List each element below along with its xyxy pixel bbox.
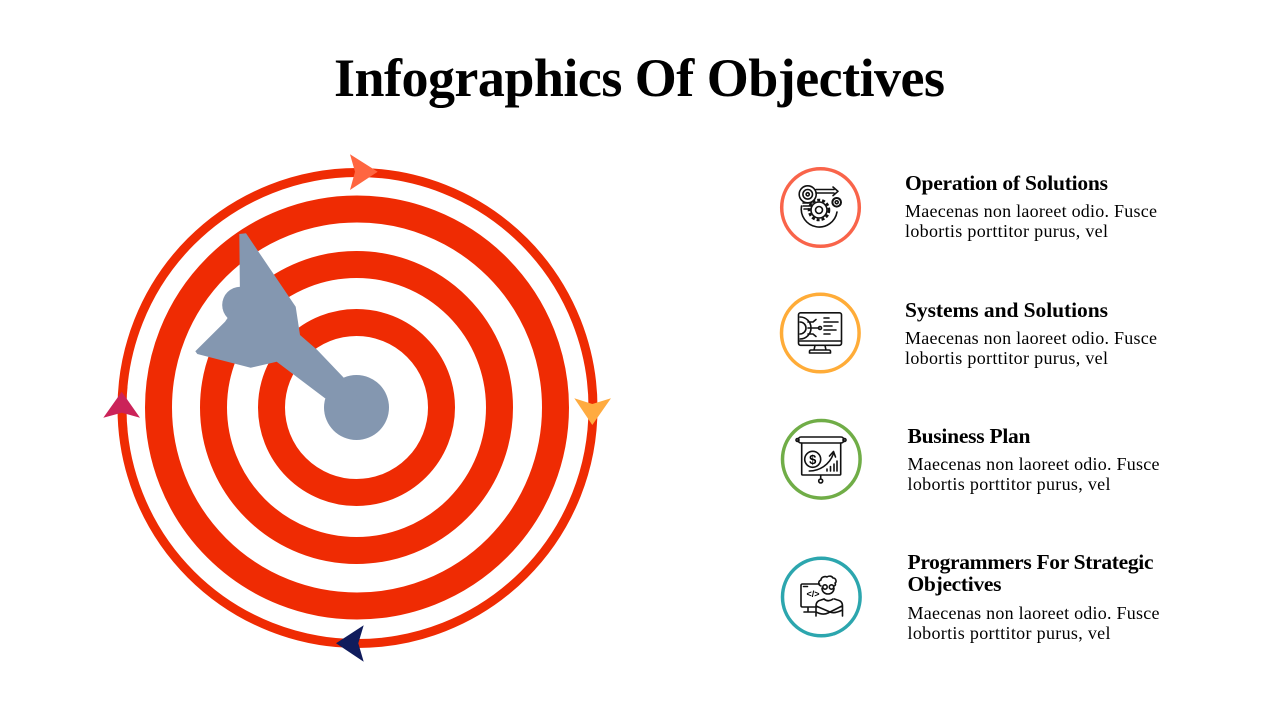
description bbox=[908, 603, 1160, 643]
arrow: yellow bbox=[574, 398, 611, 425]
icon: presentation board with dollar bbox=[782, 420, 860, 498]
target ring 2 bbox=[214, 264, 500, 550]
description: Maecenas non laoreet odio. Fusce bbox=[905, 328, 1157, 348]
heading: Programmers For Strategic bbox=[908, 550, 1154, 574]
description: lobortis porttitor purus, vel bbox=[908, 474, 1110, 494]
target ring 1 bbox=[158, 209, 556, 606]
description: Maecenas non laoreet odio. Fusce bbox=[905, 201, 1157, 221]
arrow: pink bbox=[103, 392, 140, 418]
title: Infographics Of Objectives bbox=[334, 48, 945, 108]
icon: gears and light bulb bbox=[782, 169, 859, 246]
target diagram bbox=[103, 154, 611, 662]
description: lobortis porttitor purus, vel bbox=[905, 348, 1108, 368]
description bbox=[905, 201, 1157, 241]
item: Programmers For Strategic Objectives bbox=[782, 550, 1160, 643]
icon: programmer at monitor: </> bbox=[806, 589, 820, 599]
item: Operation of Solutions bbox=[782, 169, 1157, 246]
description: lobortis porttitor purus, vel bbox=[905, 221, 1108, 241]
description: Maecenas non laoreet odio. Fusce bbox=[908, 603, 1160, 623]
icon: presentation board with dollar: $ bbox=[809, 452, 817, 467]
arrow: orange bbox=[350, 154, 378, 190]
target ring 3 bbox=[272, 322, 442, 492]
heading bbox=[908, 550, 1154, 596]
dart bbox=[195, 233, 389, 440]
item: Business Plan bbox=[782, 420, 1160, 498]
description: Maecenas non laoreet odio. Fusce bbox=[908, 454, 1160, 474]
outer orbit ring bbox=[122, 172, 593, 644]
heading: Operation of Solutions bbox=[905, 171, 1108, 195]
item: Systems and Solutions bbox=[782, 294, 1157, 372]
icon: monitor with circuit bbox=[782, 294, 859, 372]
arrow: navy bbox=[336, 625, 364, 662]
heading: Business Plan bbox=[908, 424, 1031, 448]
heading: Systems and Solutions bbox=[905, 298, 1108, 322]
description bbox=[905, 328, 1157, 368]
description: lobortis porttitor purus, vel bbox=[908, 623, 1110, 643]
heading: Objectives bbox=[908, 572, 1002, 596]
icon: programmer at monitor bbox=[782, 558, 860, 636]
description bbox=[908, 454, 1160, 494]
